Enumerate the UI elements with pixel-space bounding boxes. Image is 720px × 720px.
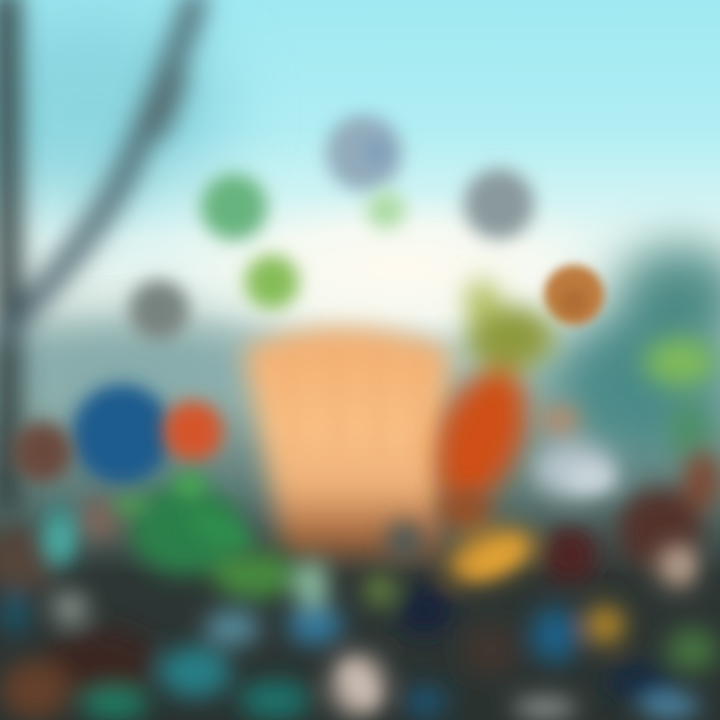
distant left hills — [0, 320, 280, 410]
horizon glow — [140, 190, 660, 350]
bright accents in pile — [51, 466, 690, 711]
icon circle: orange brown — [544, 265, 604, 325]
foreground green leaves — [112, 473, 257, 557]
icon circle: lime — [245, 255, 299, 309]
brown circle — [12, 422, 72, 482]
right green sprout — [644, 338, 716, 458]
red orange plant mass — [437, 280, 554, 506]
orange bin — [243, 328, 450, 560]
red orange circle — [163, 401, 223, 461]
bare tree — [6, 0, 195, 500]
distant right trees — [555, 245, 720, 455]
upper-left teal haze — [0, 10, 230, 210]
bin ribs — [290, 345, 420, 460]
icon circle: grey right — [464, 169, 534, 239]
icon circle: grey left — [129, 280, 189, 340]
icon circle: pale green small — [367, 191, 405, 229]
blue circle — [72, 384, 172, 484]
icon circle: blue grey top — [326, 115, 402, 191]
icon circle: green upper left — [201, 174, 267, 240]
pile of waste — [0, 406, 720, 720]
